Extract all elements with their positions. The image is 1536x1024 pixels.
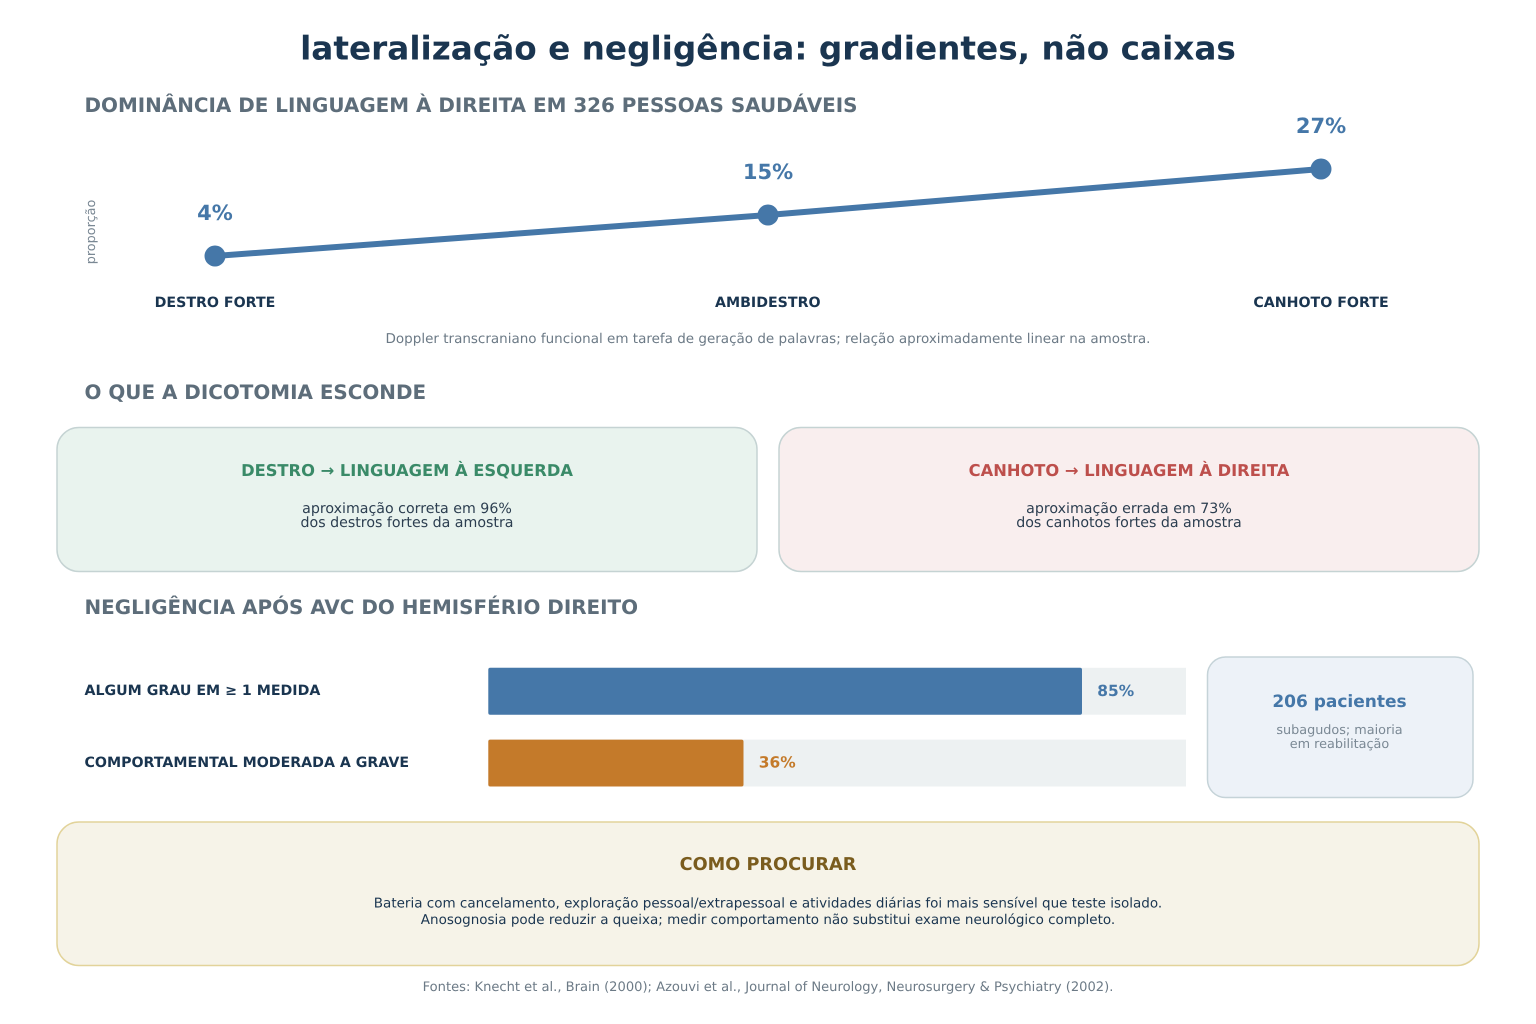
heading: neglect: NEGLIGÊNCIA APÓS AVC DO HEMISFÉRIO DIREITO	[84, 595, 638, 619]
point: ambidestro: AMBIDESTRO	[715, 295, 821, 311]
line chart	[84, 114, 1389, 311]
bar: any degree: 85%	[1097, 682, 1134, 700]
panel: canhoto: dos canhotos fortes da amostra	[1016, 515, 1242, 531]
panel: destro: aproximação correta em 96%	[302, 501, 512, 517]
point: canhoto forte: 27%	[1296, 114, 1346, 138]
point: destro forte: DESTRO FORTE	[155, 295, 275, 311]
panel: canhoto: aproximação errada em 73%	[1026, 501, 1232, 517]
panel: canhoto: CANHOTO → LINGUAGEM À DIREITA	[969, 460, 1290, 480]
panel: destro	[57, 428, 757, 572]
callout: patients: 206 pacientes	[1272, 692, 1407, 712]
point: ambidestro: 15%	[743, 160, 793, 184]
sources: Fontes: Knecht et al., Brain (2000); Azouvi et al., Journal of Neurology, Neurosurgery & Psychiatry (2002).	[423, 980, 1113, 995]
point: ambidestro	[715, 160, 821, 311]
axis label: proporção	[84, 200, 99, 264]
panel: canhoto	[779, 428, 1479, 572]
bar: any degree	[84, 668, 1186, 715]
heading: dichotomy: O QUE A DICOTOMIA ESCONDE	[84, 381, 426, 404]
panel: how to look: COMO PROCURAR	[680, 855, 857, 875]
callout: patients: em reabilitação	[1290, 737, 1389, 752]
panel: how to look	[57, 822, 1479, 966]
bar: behavioural: 36%	[759, 754, 796, 772]
chart note: Doppler transcraniano funcional em tarefa de geração de palavras; relação aproximadamente linear na amostra.	[386, 331, 1150, 347]
callout: patients: subagudos; maioria	[1276, 723, 1403, 738]
point: canhoto forte: CANHOTO FORTE	[1253, 295, 1389, 311]
bar: behavioural: COMPORTAMENTAL MODERADA A GRAVE	[84, 755, 409, 771]
bar: any degree: ALGUM GRAU EM ≥ 1 MEDIDA	[84, 683, 320, 699]
bar: behavioural	[84, 740, 1186, 786]
point: canhoto forte	[1253, 114, 1389, 311]
callout: patients	[1208, 657, 1473, 798]
trend line	[215, 169, 1321, 256]
panel: how to look: Anosognosia pode reduzir a queixa; medir comportamento não substitui exame neurológico completo.	[421, 912, 1115, 928]
point: destro forte: 4%	[197, 201, 233, 225]
panel: destro: DESTRO → LINGUAGEM À ESQUERDA	[241, 460, 573, 480]
panel: how to look: Bateria com cancelamento, exploração pessoal/extrapessoal e atividades diárias foi mais sensível que teste isolado.	[374, 896, 1162, 912]
point: destro forte	[155, 201, 275, 311]
heading: language dominance: DOMINÂNCIA DE LINGUAGEM À DIREITA EM 326 PESSOAS SAUDÁVEIS	[84, 93, 857, 117]
panel: destro: dos destros fortes da amostra	[301, 515, 513, 531]
title: lateralização e negligência: gradientes, não caixas	[300, 30, 1236, 68]
